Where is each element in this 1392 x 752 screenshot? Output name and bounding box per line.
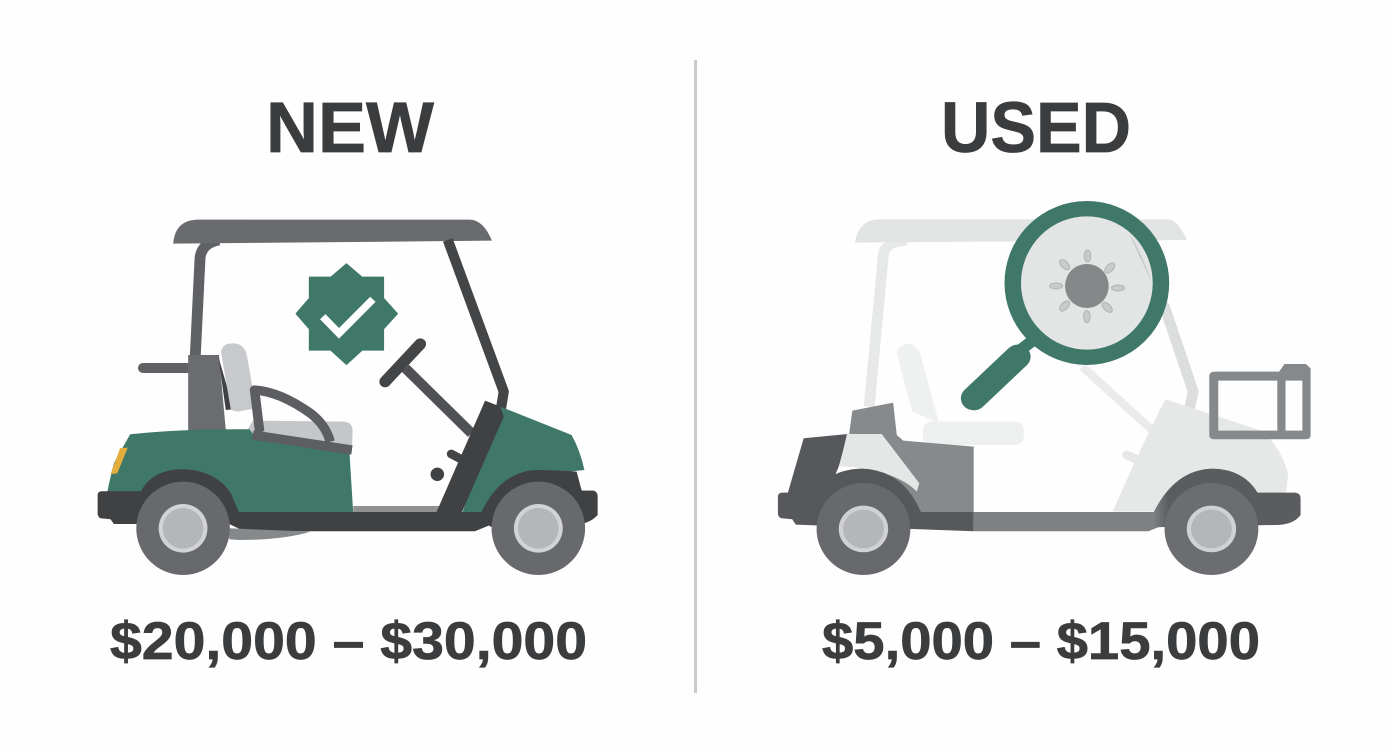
seat back — [221, 343, 256, 412]
dark rear corner — [786, 434, 848, 500]
icon: verified check badge — [296, 264, 397, 364]
faded front body — [1113, 399, 1288, 512]
rear rail — [143, 353, 195, 383]
faded seat bottom — [923, 422, 1024, 445]
lens — [1013, 209, 1161, 357]
seat support block — [188, 355, 226, 432]
battery box outline — [1209, 364, 1311, 439]
pedal knob — [431, 468, 444, 481]
price: new: $20,000 – $30,000 — [110, 612, 587, 671]
chassis mid grey — [974, 512, 1168, 531]
rear wheel — [817, 483, 910, 575]
faded front strut — [1165, 307, 1193, 413]
front canopy strut — [448, 240, 504, 417]
faded lever — [1127, 455, 1141, 462]
chassis rear dark — [778, 493, 974, 531]
price: used: $5,000 – $15,000 — [822, 612, 1260, 671]
dark dash panel — [436, 401, 504, 513]
chassis and bumpers — [98, 490, 598, 531]
rear wheel arch — [808, 469, 921, 527]
worn patch on rear fender — [839, 434, 919, 492]
seat bottom — [248, 421, 353, 453]
front wheel — [1165, 483, 1258, 575]
magnifying glass — [974, 209, 1161, 398]
heading: NEW: NEW — [266, 89, 434, 168]
steering column — [405, 368, 472, 433]
used golf cart illustration — [778, 209, 1311, 575]
faded canopy post — [869, 240, 907, 407]
gear hub — [1065, 264, 1109, 308]
new golf cart illustration — [98, 220, 598, 575]
rear wheel arch — [139, 469, 239, 530]
faded steering column — [1082, 367, 1152, 430]
chassis front bumper — [1154, 469, 1301, 527]
handle — [974, 357, 1018, 398]
tail light — [111, 448, 128, 474]
pedal lever — [451, 454, 461, 459]
armrest — [253, 390, 352, 450]
rear canopy post — [195, 240, 219, 357]
front wheel arch — [480, 470, 582, 527]
gear teeth — [1050, 250, 1124, 323]
front wheel — [492, 482, 585, 575]
faded roof canopy — [855, 219, 1187, 243]
heading: USED: USED — [941, 89, 1131, 168]
green front body — [461, 407, 584, 515]
rear wheel — [136, 482, 230, 575]
green rear body — [107, 429, 353, 513]
roof canopy — [173, 220, 492, 244]
faded seat back — [897, 344, 939, 423]
grey rear body panel — [846, 403, 974, 513]
underside shadow — [229, 528, 311, 540]
floor strip — [353, 506, 441, 514]
steering wheel — [385, 344, 420, 382]
